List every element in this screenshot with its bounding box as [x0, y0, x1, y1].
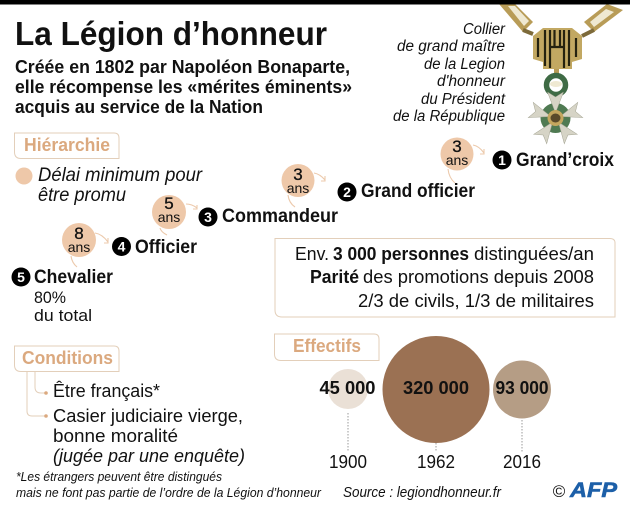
bubble: 1962: 1962 [417, 452, 455, 472]
delay: 5 years to Commandeur: 5 [164, 194, 174, 213]
delay: 3 years to Grand officier: 3 [293, 165, 303, 184]
panel: key facts [275, 238, 615, 317]
bubble: 2016 [493, 360, 551, 472]
rank 3: Commandeur: 3 [204, 209, 212, 225]
conditions list: Casier judiciaire vierge, [53, 405, 243, 426]
panel: workforce heading: Effectifs [293, 336, 361, 356]
conditions list: bonne moralité [53, 425, 178, 446]
caption: collar [393, 21, 506, 125]
delay: 8 years to Officier: 8 [74, 224, 84, 243]
bubble: 2016: 93 000 [496, 378, 548, 398]
rank 5: Chevalier: Chevalier [34, 267, 114, 288]
bubble: 1962: 320 000 [403, 378, 469, 398]
panel: key facts: des promotions depuis 2008 [363, 266, 594, 287]
delay: 3 years to Grand'croix [440, 137, 484, 183]
caption: collar: de grand maître [397, 38, 505, 55]
legend: minimum delay [16, 165, 203, 206]
caption: collar: d'honneur [437, 73, 506, 90]
bubble chart: workforce by year [320, 336, 551, 472]
rank 5: Chevalier [12, 267, 114, 325]
AFP credit [553, 479, 618, 502]
delay: 3 years to Grand'croix: ans [446, 152, 468, 168]
panel: hierarchy heading [14, 133, 119, 158]
caption: collar: de la République [393, 108, 505, 125]
rank 3: Commandeur: Commandeur [222, 206, 339, 227]
subtitle: elle récompense les «mérites éminents» [15, 76, 352, 97]
rank 5: Chevalier: du total [34, 306, 92, 325]
caption: collar: Collier [463, 21, 506, 38]
footnote: mais ne font pas partie de l’ordre de la Légion d’honneur [16, 485, 322, 500]
delay: 3 years to Grand officier [282, 164, 325, 207]
icon: collar of the grand master [499, 4, 623, 144]
delay: 3 years to Grand officier: ans [287, 180, 309, 196]
delay: 3 years to Grand'croix: 3 [452, 137, 462, 156]
rank 2: Grand officier: 2 [343, 184, 351, 200]
panel: workforce heading [274, 334, 379, 360]
rank 5: Chevalier: 80% [34, 288, 66, 307]
footnote: *Les étrangers peuvent être distingués [16, 469, 222, 484]
AFP credit: © [553, 482, 566, 501]
conditions list [27, 372, 245, 466]
panel: key facts: Env. [295, 243, 329, 264]
conditions list: Être français* [53, 380, 160, 401]
caption: collar: du Président [421, 91, 506, 108]
rank 1: Grand'croix: Grand’croix [516, 150, 614, 171]
caption: collar: de la Legion [424, 56, 505, 73]
bubble: 1962 [382, 336, 490, 472]
panel: key facts: 3 000 personnes [333, 243, 469, 264]
rank 1: Grand'croix: 1 [498, 152, 506, 168]
rank 4: Officier: 4 [118, 238, 126, 254]
panel: key facts: distinguées/an [474, 243, 594, 264]
footnote [16, 469, 322, 500]
delay: 8 years to Officier [62, 223, 108, 267]
legend: minimum delay: Délai minimum pour [38, 165, 203, 186]
delay: 5 years to Commandeur: ans [158, 209, 180, 225]
panel: hierarchy heading: Hiérarchie [24, 135, 110, 155]
AFP credit: AFP [569, 479, 618, 502]
rank 4: Officier: Officier [135, 237, 198, 258]
legend: minimum delay: être promu [38, 185, 126, 206]
bubble: 1900 [320, 369, 376, 472]
subtitle: acquis au service de la Nation [15, 96, 263, 117]
conditions list: (jugée par une enquête) [53, 445, 245, 466]
rank 2: Grand officier: Grand officier [361, 181, 476, 202]
title: La Légion d’honneur [15, 15, 327, 52]
rank 4: Officier [112, 237, 198, 258]
subtitle [15, 56, 352, 117]
subtitle: Créée en 1802 par Napoléon Bonaparte, [15, 56, 350, 77]
bubble: 1900: 1900 [329, 452, 367, 472]
delay: 8 years to Officier: ans [68, 239, 90, 255]
panel: key facts: Parité [310, 266, 359, 287]
panel: key facts: 2/3 de civils, 1/3 de militaires [358, 290, 594, 311]
rank 5: Chevalier: 5 [17, 269, 25, 285]
panel: conditions heading: Conditions [22, 348, 113, 368]
bubble: 1900: 45 000 [320, 378, 376, 398]
delay: 5 years to Commandeur [152, 194, 197, 235]
bubble: 2016: 2016 [503, 452, 541, 472]
source: Source : legiondhonneur.fr [343, 485, 502, 501]
